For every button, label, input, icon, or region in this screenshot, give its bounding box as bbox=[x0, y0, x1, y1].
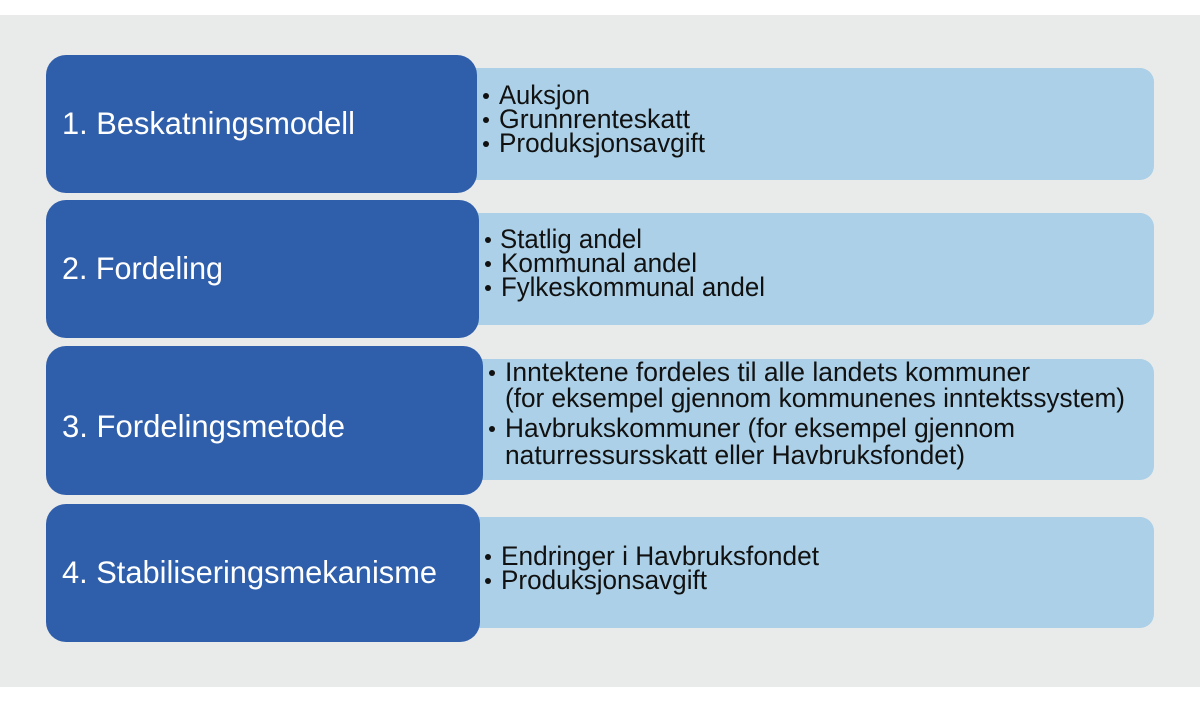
panel: row 4 Stabiliseringsmekanisme bbox=[46, 504, 1154, 642]
row 3 heading: 3. Fordelingsmetode bbox=[62, 408, 345, 444]
row 2 list bbox=[485, 224, 765, 302]
row 4 detail panel bbox=[440, 517, 1154, 628]
row 1 detail panel bbox=[440, 68, 1154, 180]
row 2 list: Kommunal andel bbox=[501, 248, 697, 278]
row 3 list bbox=[489, 357, 1125, 470]
row 3 list: Havbrukskommuner (for eksempel gjennom bbox=[505, 413, 1015, 443]
row 3 list: naturressursskatt eller Havbruksfondet) bbox=[505, 440, 965, 470]
row 4 heading: 4. Stabiliseringsmekanisme bbox=[62, 554, 437, 590]
row 4 heading box bbox=[46, 504, 480, 642]
row 2 heading box bbox=[46, 200, 479, 338]
row 2 list: Fylkeskommunal andel bbox=[501, 272, 765, 302]
row 2 detail panel bbox=[440, 213, 1154, 325]
row 2 heading: 2. Fordeling bbox=[62, 250, 223, 286]
row 3 detail panel bbox=[440, 359, 1154, 480]
row 1 list: Auksjon bbox=[499, 80, 590, 110]
row 2 list: Statlig andel bbox=[500, 224, 642, 254]
row 1 list: Grunnrenteskatt bbox=[499, 104, 690, 134]
row 3 heading box bbox=[46, 346, 483, 495]
panel: row 1 Beskatningsmodell bbox=[46, 55, 1154, 193]
row 1 list: Produksjonsavgift bbox=[499, 128, 705, 158]
row 4 list: Endringer i Havbruksfondet bbox=[501, 541, 819, 571]
panel: row 3 Fordelingsmetode bbox=[46, 346, 1154, 495]
row 4 list bbox=[485, 541, 819, 595]
row 3 list: Inntektene fordeles til alle landets kommuner bbox=[505, 357, 1030, 387]
row 1 heading box bbox=[46, 55, 477, 193]
panel: row 2 Fordeling bbox=[46, 200, 1154, 338]
row 1 list bbox=[483, 80, 705, 158]
row 4 list: Produksjonsavgift bbox=[501, 565, 707, 595]
row 1 heading: 1. Beskatningsmodell bbox=[62, 105, 355, 141]
row 3 list: (for eksempel gjennom kommunenes inntektssystem) bbox=[505, 383, 1125, 413]
